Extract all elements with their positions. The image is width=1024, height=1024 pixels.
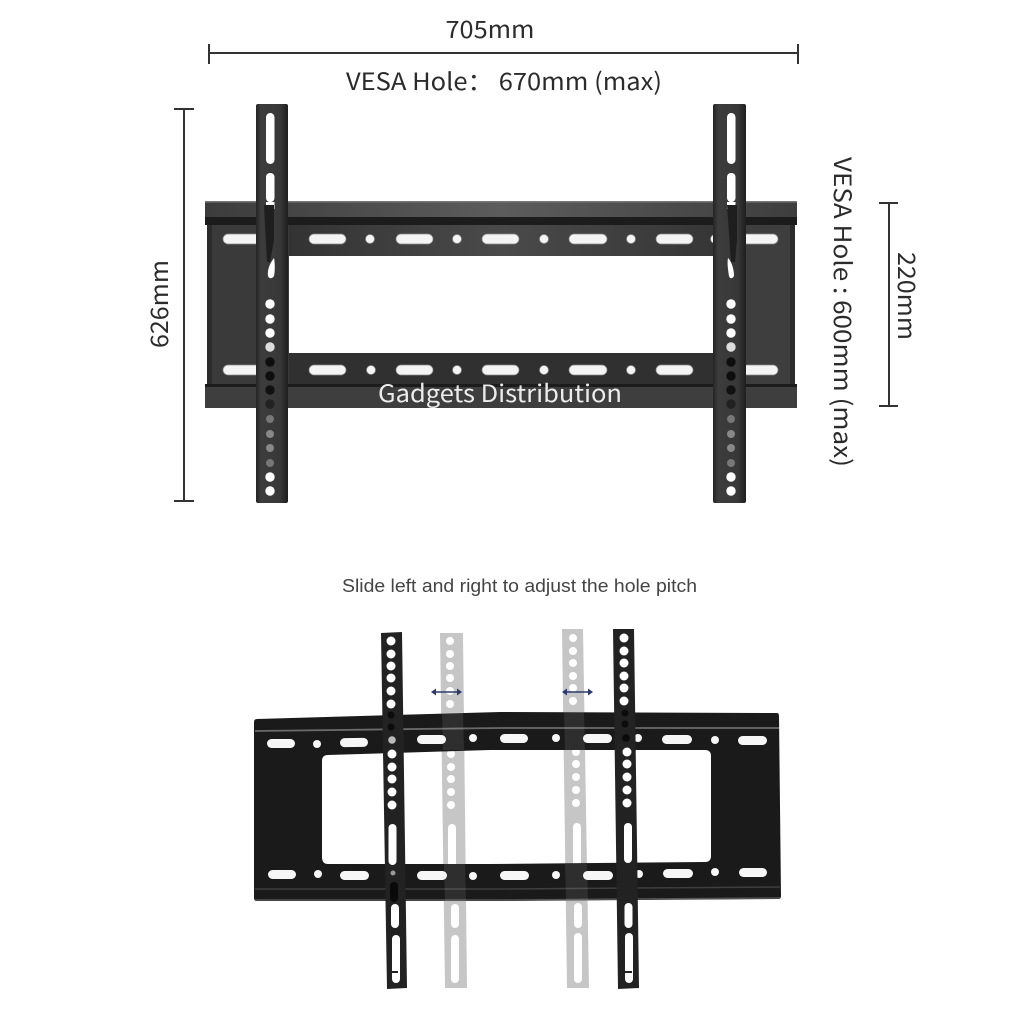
caption: slide to adjust: Slide left and right to adjust the hole pitch <box>342 576 697 596</box>
wall plate <box>254 712 781 901</box>
ghost strip right, behind plate <box>562 629 589 988</box>
left height dimension: 626mm <box>140 109 194 501</box>
left vertical strip <box>256 104 288 503</box>
ghost strip left, behind plate <box>440 633 467 988</box>
VESA horizontal label: VESA Hole： 670mm (max) <box>346 62 662 97</box>
left dark strip <box>381 632 407 989</box>
right vertical strip <box>713 104 746 503</box>
lower slots <box>223 365 778 375</box>
left height dimension: 626mm: 626mm <box>140 260 175 348</box>
lower slots <box>268 868 767 880</box>
upper slots <box>223 234 778 244</box>
bottom bracket diagram <box>254 629 781 989</box>
top width dimension: 705mm: 705mm <box>446 10 534 45</box>
ghost overlays on plate <box>442 712 588 901</box>
VESA vertical label: VESA Hole : 600mm (max) <box>827 157 862 467</box>
top width dimension: 705mm <box>209 10 798 64</box>
upper slots <box>267 734 767 748</box>
top bracket diagram <box>205 104 797 503</box>
icon: left double-headed arrow <box>431 688 462 696</box>
watermark: Gadgets Distribution <box>378 374 622 409</box>
icon: right double-headed arrow <box>562 688 593 696</box>
right dimension: 220mm <box>879 203 926 406</box>
wall plate <box>205 201 797 408</box>
right dark strip <box>613 629 639 989</box>
right dimension: 220mm: 220mm <box>891 252 926 340</box>
